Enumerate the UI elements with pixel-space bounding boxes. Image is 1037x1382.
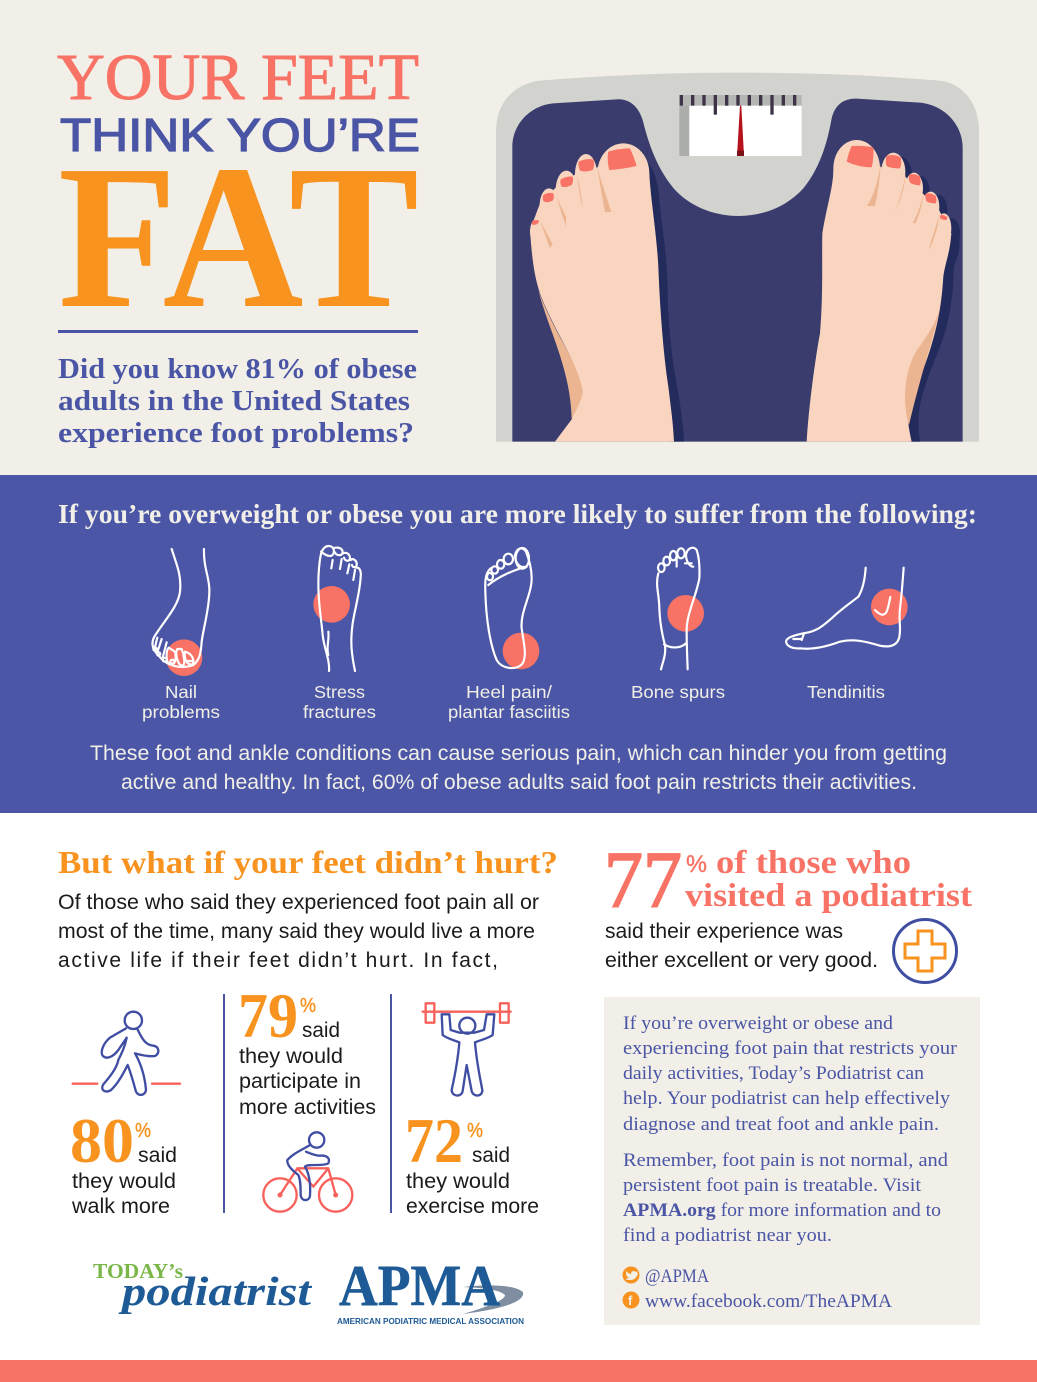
what-if paragraph: most of the time, many said they would live a more bbox=[58, 920, 535, 943]
stat: 79 percent: they would bbox=[239, 1045, 343, 1068]
icon: cyclist bbox=[263, 1132, 352, 1212]
logo: APMA: AMERICAN PODIATRIC MEDICAL ASSOCIATION bbox=[337, 1316, 524, 1326]
stat: 77 percent: % bbox=[686, 851, 707, 878]
conditions paragraph: These foot and ankle conditions can cause serious pain, which can hinder you from getting bbox=[90, 742, 947, 765]
panel: call to action: daily activities, Today’s Podiatrist can bbox=[623, 1063, 925, 1084]
logo: APMA: APMA bbox=[339, 1253, 500, 1318]
stat: 80 percent bbox=[70, 1105, 177, 1218]
stat: 72 percent: % bbox=[467, 1120, 483, 1142]
stat: 72 percent: exercise more bbox=[406, 1195, 539, 1218]
heading: what if: But what if your feet didn’t hurt? bbox=[58, 844, 558, 880]
stat: 72 percent: 72 bbox=[405, 1105, 463, 1176]
condition labels bbox=[142, 682, 885, 722]
podiatrist experience text: said their experience was bbox=[605, 920, 843, 943]
right foot bbox=[807, 140, 960, 442]
right toenails bbox=[847, 146, 947, 220]
panel: call to action: If you’re overweight or obese and bbox=[623, 1013, 894, 1034]
podiatrist experience text bbox=[605, 920, 878, 972]
icon: stress fractures bbox=[313, 546, 361, 671]
condition labels: fractures bbox=[303, 702, 376, 722]
logo: Today's Podiatrist: TODAY’s bbox=[93, 1259, 183, 1283]
icon: walker bbox=[73, 1012, 180, 1095]
panel: call to action: APMA.org for more information and to bbox=[623, 1200, 941, 1221]
illustration: feet on bathroom scale bbox=[496, 73, 979, 442]
condition labels: Bone spurs bbox=[631, 682, 725, 702]
conditions paragraph: active and healthy. In fact, 60% of obese adults said foot pain restricts their activities. bbox=[121, 771, 917, 794]
panel: call to action: www.facebook.com/TheAPMA bbox=[645, 1291, 892, 1312]
stat: 79 percent: more activities bbox=[239, 1096, 376, 1119]
stat: 79 percent: participate in bbox=[239, 1070, 361, 1093]
icon: weightlifter bbox=[423, 1003, 511, 1096]
stat: 80 percent: walk more bbox=[71, 1195, 170, 1218]
condition labels: problems bbox=[142, 702, 220, 722]
logo: Today's Podiatrist: podiatrist bbox=[118, 1268, 313, 1314]
title: YOUR FEET bbox=[57, 41, 419, 114]
icon: facebook bbox=[622, 1292, 640, 1308]
icon: twitter bbox=[622, 1266, 640, 1284]
left toenails bbox=[532, 148, 637, 225]
icon: tendinitis bbox=[786, 568, 908, 649]
panel: call to action: Remember, foot pain is not normal, and bbox=[623, 1150, 949, 1171]
panel: conditions bbox=[0, 475, 1037, 813]
stat: 80 percent: % bbox=[135, 1120, 151, 1142]
intro question: experience foot problems? bbox=[58, 417, 414, 449]
stat: 79 percent: 79 bbox=[238, 980, 298, 1051]
stat: 79 percent: said bbox=[302, 1019, 340, 1042]
stat: 77 percent: of those who bbox=[716, 845, 911, 881]
title: FAT bbox=[58, 122, 419, 351]
condition labels: Heel pain/ bbox=[466, 682, 552, 702]
icon: facebook: f bbox=[628, 1293, 633, 1308]
condition labels: Nail bbox=[165, 682, 197, 702]
podiatrist experience text: either excellent or very good. bbox=[605, 949, 878, 972]
icon: nail problems bbox=[152, 549, 209, 676]
panel: call to action: diagnose and treat foot and ankle pain. bbox=[623, 1114, 939, 1135]
icon: heel pain bbox=[485, 548, 539, 669]
panel: call to action: help. Your podiatrist can help effectively bbox=[623, 1088, 951, 1109]
what-if paragraph: active life if their feet didn’t hurt. In fact, bbox=[58, 949, 498, 972]
panel: call to action: experiencing foot pain that restricts your bbox=[623, 1038, 958, 1059]
stat: 77 percent: 77 bbox=[604, 837, 682, 925]
icon: medical cross bbox=[894, 920, 956, 982]
conditions paragraph bbox=[90, 742, 947, 794]
intro question: Did you know 81% of obese bbox=[58, 353, 417, 385]
stat: 79 percent bbox=[238, 980, 376, 1119]
intro question: adults in the United States bbox=[58, 385, 410, 417]
stat: 80 percent: they would bbox=[72, 1170, 176, 1193]
condition labels: Tendinitis bbox=[807, 682, 885, 702]
panel: call to action: find a podiatrist near you. bbox=[623, 1225, 832, 1246]
conditions heading: If you’re overweight or obese you are more likely to suffer from the following: bbox=[58, 499, 977, 529]
stat: 72 percent: said bbox=[472, 1144, 510, 1167]
what-if paragraph: Of those who said they experienced foot pain all or bbox=[58, 891, 539, 914]
what-if paragraph bbox=[58, 891, 539, 972]
logo: Today's Podiatrist bbox=[93, 1259, 313, 1314]
condition labels: Stress bbox=[314, 682, 365, 702]
panel: call to action: persistent foot pain is treatable. Visit bbox=[623, 1175, 922, 1196]
stat: 77 percent: visited a podiatrist bbox=[685, 878, 972, 914]
scale window bbox=[679, 95, 802, 156]
stat: 79 percent: % bbox=[300, 995, 316, 1017]
title: THINK YOU’RE bbox=[60, 109, 420, 161]
stat: 77 percent bbox=[604, 837, 972, 925]
icon: bone spurs bbox=[657, 548, 704, 669]
condition labels: plantar fasciitis bbox=[448, 702, 570, 722]
left foot bbox=[530, 143, 684, 442]
panel: call to action: @APMA bbox=[645, 1266, 709, 1287]
stat: 80 percent: 80 bbox=[70, 1105, 134, 1176]
stat: 80 percent: said bbox=[138, 1144, 177, 1167]
stat: 72 percent: they would bbox=[406, 1170, 510, 1193]
intro question bbox=[58, 353, 417, 449]
panel: call to action bbox=[604, 997, 980, 1325]
stat: 72 percent bbox=[405, 1105, 539, 1218]
